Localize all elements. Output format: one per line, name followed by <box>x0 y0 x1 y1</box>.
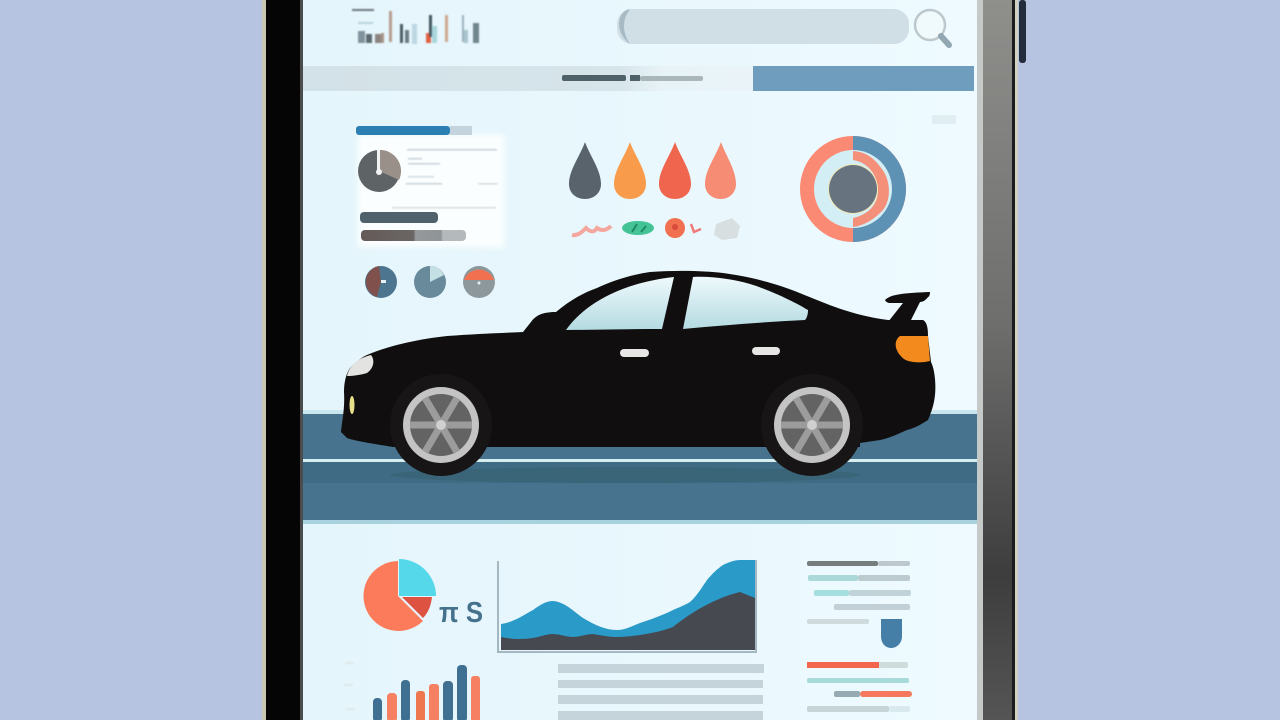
phone screen <box>303 0 977 720</box>
area chart <box>498 560 756 652</box>
door handles <box>620 347 780 357</box>
search bar <box>617 9 909 44</box>
header mini chart <box>352 9 479 44</box>
car body <box>341 271 935 447</box>
rear window <box>683 277 808 329</box>
droplet: salmon <box>705 142 736 199</box>
tail light <box>896 336 930 362</box>
panel: summary card <box>356 126 504 247</box>
pie chart: share <box>364 559 436 631</box>
droplets <box>569 142 736 199</box>
droplet: orange <box>614 142 646 199</box>
front window <box>566 277 674 330</box>
progress bar <box>356 126 472 135</box>
front marker <box>350 396 354 414</box>
small pie: three <box>463 266 495 298</box>
front wheel <box>390 374 492 476</box>
headlight <box>347 355 373 376</box>
donut chart <box>800 136 906 242</box>
small pie: two <box>414 266 446 298</box>
text stripes <box>558 664 764 720</box>
droplet: red <box>659 142 691 199</box>
icon: magnifier <box>915 10 949 45</box>
pie label: π S <box>439 597 483 629</box>
car illustration <box>341 271 935 476</box>
pie chart: card <box>358 150 401 192</box>
road <box>303 410 977 524</box>
badge <box>881 619 902 648</box>
faint tag <box>932 115 956 124</box>
spoiler <box>885 292 930 322</box>
small pie: one <box>365 266 397 298</box>
phone frame <box>262 0 1026 720</box>
card text lines <box>392 149 498 208</box>
rear wheel <box>761 374 863 476</box>
navigation bar <box>303 66 974 91</box>
icon row: squiggles <box>572 218 740 240</box>
legend list <box>807 561 912 712</box>
card bars <box>360 212 466 241</box>
droplet: slate <box>569 142 601 199</box>
bar chart <box>344 662 480 720</box>
